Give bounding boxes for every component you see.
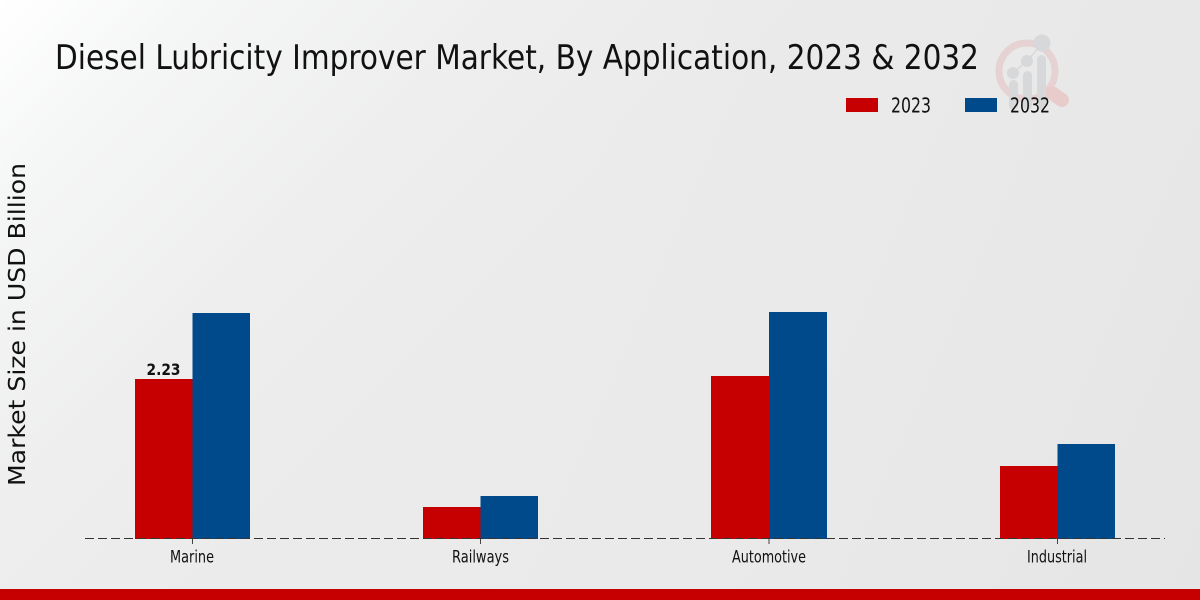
x-axis labels: Industrial — [1027, 548, 1087, 568]
bar group: Automotive — [711, 312, 827, 539]
legend item: 2023: 2023 — [891, 94, 931, 118]
bar group: Industrial — [1000, 444, 1115, 539]
legend item: 2023 — [846, 94, 931, 118]
legend item: 2032: 2032 — [1010, 94, 1050, 118]
bar group: Marine — [135, 313, 250, 539]
y-axis label: Market Size in USD Billion — [5, 163, 31, 486]
legend — [846, 94, 1050, 118]
x-axis baseline — [85, 538, 1165, 544]
title: Diesel Lubricity Improver Market, By Application, 2023 & 2032 — [55, 38, 979, 78]
legend item: 2032 — [965, 94, 1050, 118]
footer bar — [0, 589, 1200, 600]
icon: watermark magnifier logo — [999, 34, 1062, 110]
x-axis labels: Automotive — [732, 548, 806, 568]
data label: 2.23: 2.23 — [146, 360, 180, 379]
x-axis labels — [170, 548, 1087, 568]
x-axis labels: Railways — [452, 548, 509, 568]
bar chart — [85, 312, 1165, 568]
bar group: Railways — [423, 496, 538, 539]
x-axis labels: Marine — [170, 548, 214, 568]
